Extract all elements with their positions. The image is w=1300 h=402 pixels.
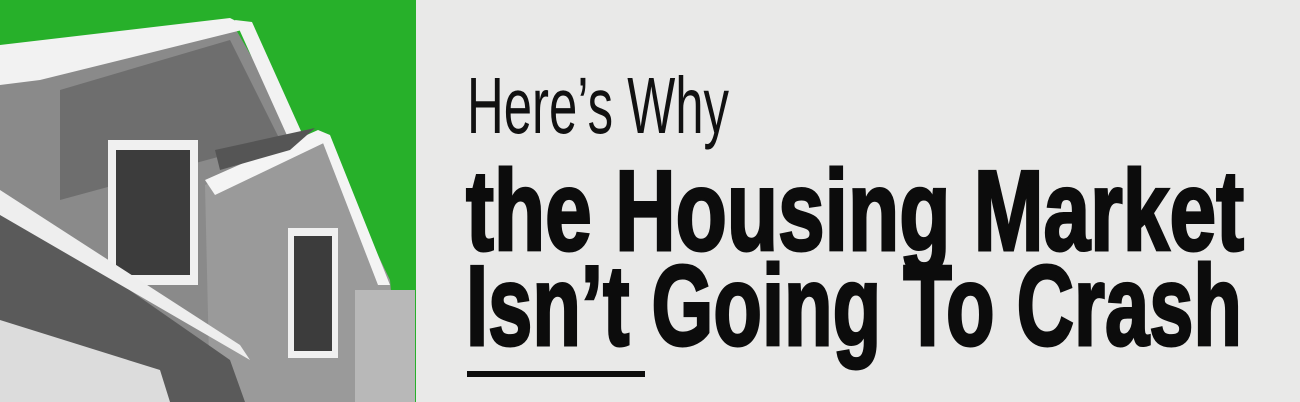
panel: house photo [0,0,416,402]
underline [467,371,645,377]
title line 1: Here’s Why [467,61,729,150]
